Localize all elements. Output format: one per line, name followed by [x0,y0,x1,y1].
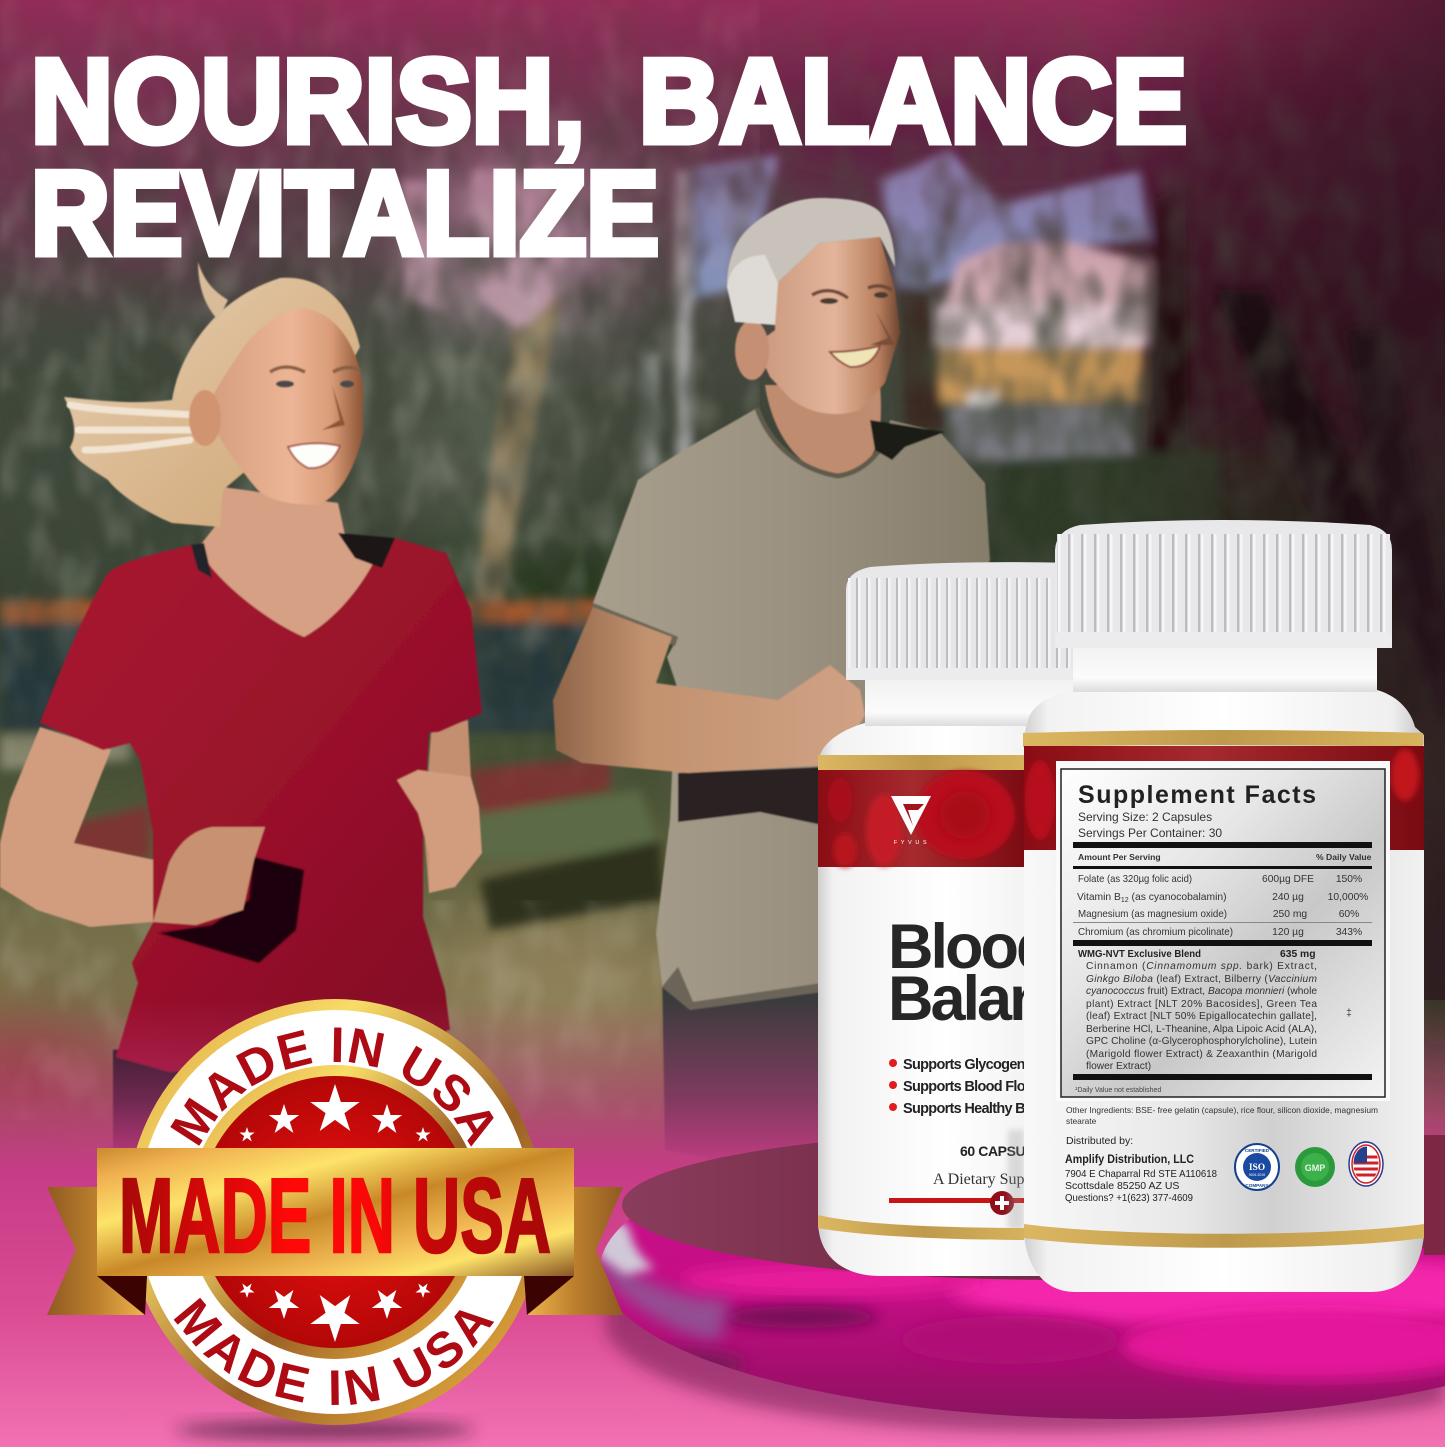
column headings [1078,852,1372,862]
head [755,237,900,414]
ear [189,390,221,446]
neck [765,385,881,478]
left fist [153,827,265,925]
nutrient rows: Vitamin B [1077,892,1121,903]
title: BALANCE [639,35,1187,168]
nose shadow [322,385,345,430]
distributor: Questions? +1(623) 377-4609 [1065,1192,1193,1204]
capsule count: 60 CAPSULES [960,1143,1051,1159]
torso shirt [40,538,482,1072]
nutrient rows: Folate (as 320µg folic acid) [1078,874,1192,885]
distributor: Scottsdale 85250 AZ US [1065,1180,1179,1192]
serving info [1078,810,1222,840]
icon: ISO seal: 9001:2015 [1249,1173,1265,1177]
nutrient rows: 12 [1121,897,1129,904]
pink floor gradient [0,1000,1445,1447]
nutrient rows: 343% [1336,927,1362,938]
exclusive blend [1078,949,1316,960]
dietary line: A Dietary Supplement [933,1171,1077,1188]
man jogger [553,198,990,1180]
collar shadow [870,420,945,460]
arc lettering [170,1028,494,1405]
title: NOURISH, [31,35,585,168]
podium top [622,1130,1445,1280]
eyes and brows [270,367,360,388]
back bottle cap [846,562,1073,680]
nutrient rows [1077,874,1368,938]
hand shadow [159,857,304,963]
label wrap [1024,745,1424,1235]
arc lettering: MADE IN USA [174,1298,494,1405]
arc lettering: MADE IN USA [170,1028,494,1147]
distributor [1065,1135,1217,1204]
sleeve shadow band [678,767,822,825]
hair [727,198,895,325]
exclusive blend: 635 mg [1280,949,1316,960]
back bottle body [818,680,1075,1276]
front bottle cap [1055,520,1392,648]
icon: GMP seal [1295,1147,1335,1187]
icon: USA flag seal [1349,1142,1383,1186]
other ingredients: Other Ingredients: BSE- free gelatin (capsule), rice flour, silicon dioxide, magnesium [1066,1105,1378,1115]
FYVUS logo [891,796,931,846]
bottle: supplement facts (front bottle) [1023,520,1424,1292]
distributor: 7904 E Chaparral Rd STE A110618 [1065,1168,1217,1180]
front bottle body [1024,645,1424,1292]
serving info: Servings Per Container: 30 [1078,826,1222,840]
nutrient rows: (as cyanocobalamin) [1129,892,1227,903]
blend ingredients: Ginkgo Biloba (leaf) Extract, Bilberry (Vaccinium [1086,974,1318,985]
blend ingredients: cyanococcus fruit) Extract, Bacopa monnieri (whole [1086,986,1317,997]
ribbon folds [97,1276,574,1315]
column headings: % Daily Value [1316,852,1372,862]
hair flyaway highlights [70,405,195,450]
nutrient rows: 150% [1336,874,1362,885]
footnote: ¹Daily Value not established [1075,1087,1161,1094]
badge: made in USA [47,999,623,1447]
blend ingredients: (leaf) Extract [NLT 50% Epigallocatechin gallate], [1086,1011,1317,1022]
ribbon banner [97,1148,574,1276]
plus divider [889,1191,1029,1215]
product name: Balance [888,964,1110,1034]
benefits list: Supports Glycogen [903,1057,1025,1073]
title: REVITALIZE [31,147,659,280]
stars [239,1084,431,1342]
nutrient rows: 120 µg [1272,927,1304,938]
blend ingredients: ‡ [1346,1008,1352,1019]
right arm [424,720,482,893]
podium rim [600,1219,1445,1419]
seal outer ring [127,999,543,1425]
hair back [64,278,360,527]
blend ingredients: Berberine HCl, L-Theanine, Alpa Lipoic Acid (ALA), [1086,1024,1317,1035]
icon: ISO seal: ISO [1249,1163,1265,1173]
nose shadow [870,310,895,345]
nutrient rows: Magnesium (as magnesium oxide) [1078,909,1227,920]
ear [735,320,769,380]
nutrient rows: Chromium (as chromium picolinate) [1078,927,1233,938]
left arm [0,727,265,927]
smile [830,346,880,367]
blend ingredients: GPC Choline (α-Glycerophosphorylcholine), Lutein [1086,1036,1317,1047]
blend ingredients: Cinnamon (Cinnamomum spp. bark) Extract, [1086,961,1317,972]
leggings [113,1020,450,1150]
right fist [397,770,482,893]
other ingredients: stearate [1066,1116,1097,1126]
back bottle label [818,755,1024,1240]
icon: ISO seal: CERTIFIED [1245,1148,1270,1153]
face [204,308,363,505]
blend ingredients: flower Extract) [1086,1061,1151,1072]
product name: Blood [888,912,1051,982]
product name [892,922,1024,1020]
nutrient rows: 60% [1339,909,1359,920]
seal inner disc [188,1065,482,1359]
other ingredients [1066,1105,1378,1126]
bottle: Blood Balance front label (back bottle) [818,562,1073,1276]
eyes [812,286,892,304]
blend ingredients: (Marigold flower Extract) & Zeaxanthin (Marigold [1086,1049,1317,1060]
woman jogger [0,262,482,1150]
banner text: MADE IN USA [119,1157,551,1275]
exclusive blend: WMG-NVT Exclusive Blend [1078,949,1201,960]
distributor: Distributed by: [1066,1135,1133,1147]
smile [288,443,340,468]
icon: GMP seal: GMP [1305,1163,1325,1173]
panel heading: Supplement Facts [1078,781,1316,809]
icon: ISO seal: COMPANY [1245,1183,1269,1188]
column headings: Amount Per Serving [1078,852,1161,862]
nutrient rows: 10,000% [1328,892,1368,903]
nutrient rows: 600µg DFE [1262,874,1314,885]
icon: ISO seal [1235,1144,1279,1190]
nutrient rows: 250 mg [1273,909,1307,920]
trousers [662,965,820,1180]
t-shirt [593,408,990,1002]
benefits list [889,1058,1024,1116]
blend ingredients [1086,961,1352,1072]
supplement facts panel [1061,769,1385,1097]
neck and chest [198,487,382,637]
podium [598,1119,1445,1432]
FYVUS logo: FYVUS [894,840,930,846]
arm [553,607,865,773]
serving info: Serving Size: 2 Capsules [1078,810,1212,824]
blend ingredients: plant) Extract [NLT 20% Bacosides], Green Tea [1086,999,1317,1010]
title [31,35,1187,280]
distributor: Amplify Distribution, LLC [1065,1152,1194,1166]
nutrient rows: 240 µg [1272,892,1304,903]
podium shadow [606,1300,1445,1432]
benefits list: Supports Blood Flow [903,1079,1037,1095]
ribbon tails [47,1187,623,1315]
benefits list: Supports Healthy Blood [903,1101,1053,1117]
